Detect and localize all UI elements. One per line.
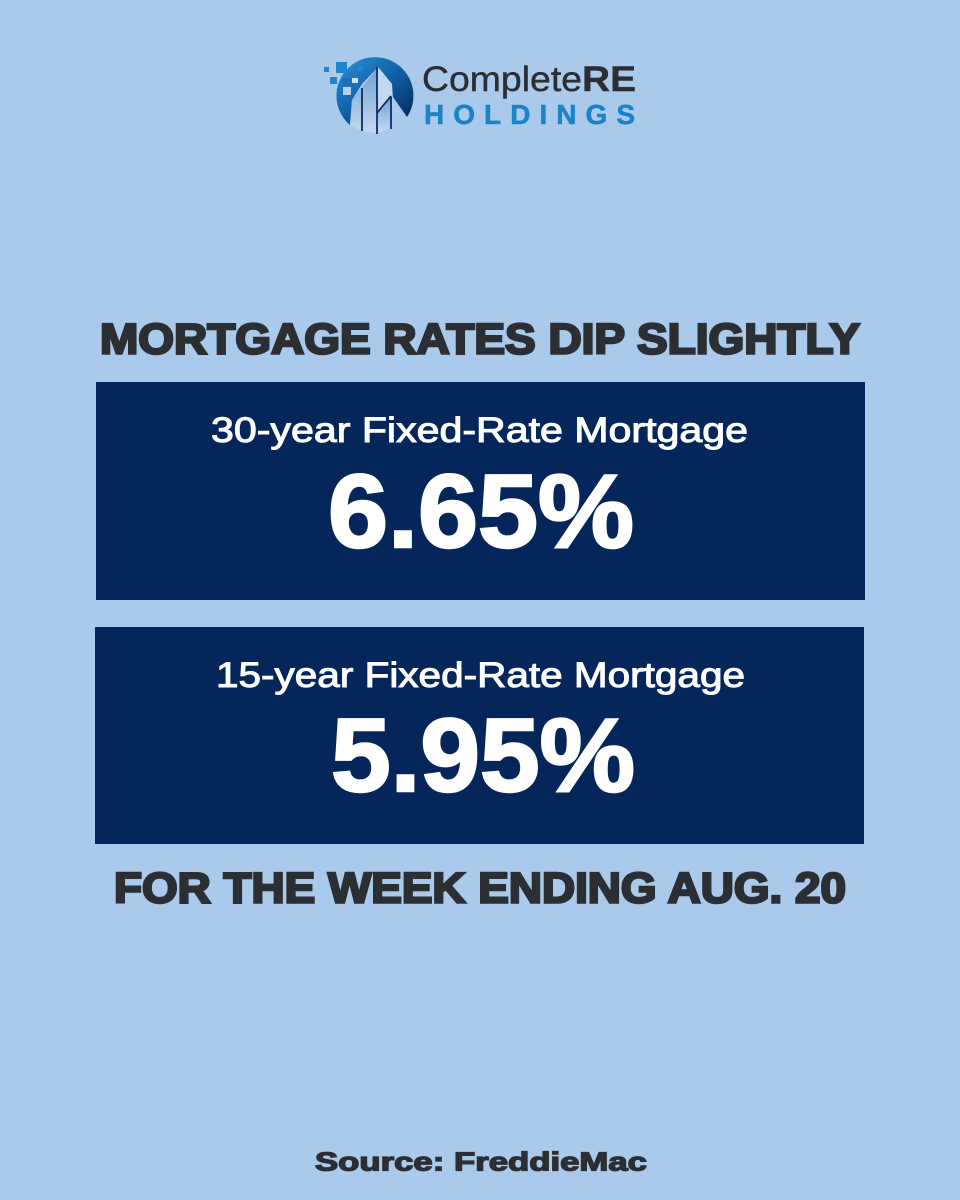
subtitle: FOR THE WEEK ENDING AUG. 20 [114,864,846,912]
value: 6.65%: 6.65% [328,454,634,570]
logo wordmark: HOLDINGS: HOLDINGS [424,99,635,130]
label: 15-year: 15-year Fixed-Rate Mortgage [216,656,745,695]
label: 30-year: 30-year Fixed-Rate Mortgage [211,411,748,450]
value: 5.95%: 5.95% [331,698,635,814]
logo: RE [582,60,636,99]
source: Source: FreddieMac [315,1146,647,1176]
title: MORTGAGE RATES DIP SLIGHTLY [100,316,860,364]
icon: building in disc [324,57,413,134]
logo [324,57,636,134]
panel: 30-year rate [96,382,865,600]
panel: 15-year rate [95,627,864,844]
logo wordmark: CompleteRE: Complete [422,60,582,99]
